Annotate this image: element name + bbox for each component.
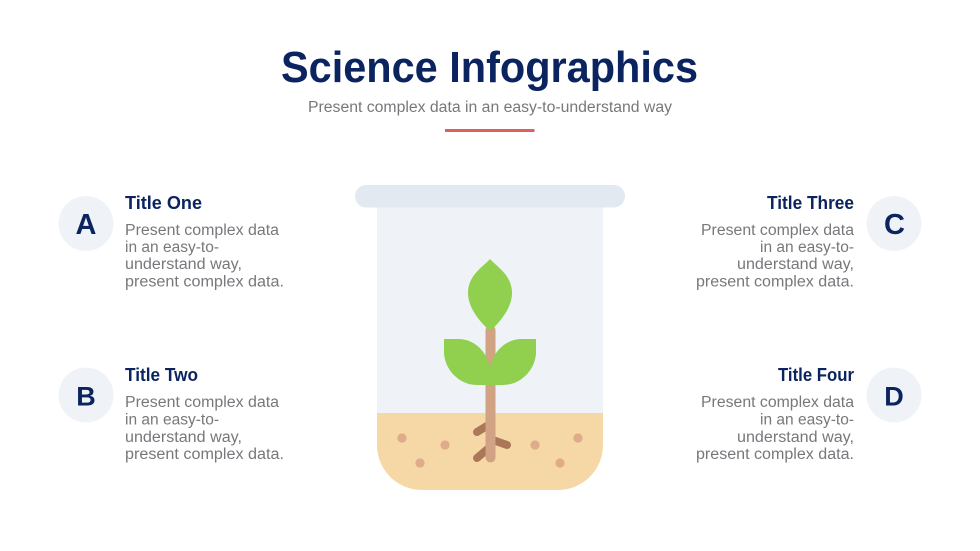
beaker body bbox=[377, 205, 603, 415]
body text: Present complex data bbox=[701, 394, 854, 411]
stem bbox=[486, 325, 496, 462]
left leaf bbox=[444, 339, 490, 385]
body text: Present complex data bbox=[125, 394, 279, 411]
accent underline bbox=[445, 129, 534, 132]
body text: understand way, bbox=[125, 429, 242, 446]
item C: C bbox=[884, 209, 905, 241]
subtitle: Present complex data in an easy-to-understand way bbox=[308, 99, 672, 116]
beaker rim bbox=[355, 185, 625, 208]
body text: present complex data. bbox=[696, 446, 854, 463]
heading: Title Four bbox=[778, 365, 854, 385]
body text: in an easy-to- bbox=[125, 412, 219, 428]
badge C bbox=[866, 196, 922, 251]
body text: present complex data. bbox=[125, 274, 284, 290]
roots bbox=[477, 424, 507, 458]
body text: Present complex data bbox=[701, 222, 854, 239]
body text: present complex data. bbox=[125, 446, 284, 463]
body text: present complex data. bbox=[696, 274, 854, 290]
badge B bbox=[58, 368, 114, 422]
top leaf bbox=[468, 259, 512, 331]
item D bbox=[696, 365, 922, 463]
body text: in an easy-to- bbox=[760, 239, 854, 256]
body text: understand way, bbox=[737, 429, 854, 446]
item A bbox=[58, 193, 284, 290]
heading: Title Three bbox=[767, 193, 854, 213]
body text: in an easy-to- bbox=[125, 239, 219, 256]
body text: in an easy-to- bbox=[760, 412, 854, 428]
title: Science Infographics bbox=[281, 43, 698, 92]
item D: D bbox=[884, 382, 904, 412]
right leaf bbox=[490, 339, 536, 385]
soil pebbles bbox=[397, 433, 583, 468]
item A: A bbox=[76, 209, 97, 241]
heading: Title One bbox=[125, 193, 202, 213]
item B bbox=[58, 365, 284, 463]
badge D bbox=[866, 368, 922, 422]
soil bbox=[377, 413, 603, 490]
heading: Title Two bbox=[125, 365, 198, 385]
body text: Present complex data bbox=[125, 222, 279, 239]
body text: understand way, bbox=[737, 256, 854, 273]
illustration: plant in beaker bbox=[355, 185, 625, 490]
badge A bbox=[58, 196, 114, 251]
item B: B bbox=[76, 382, 96, 412]
body text: understand way, bbox=[125, 256, 242, 273]
item C bbox=[696, 193, 922, 290]
